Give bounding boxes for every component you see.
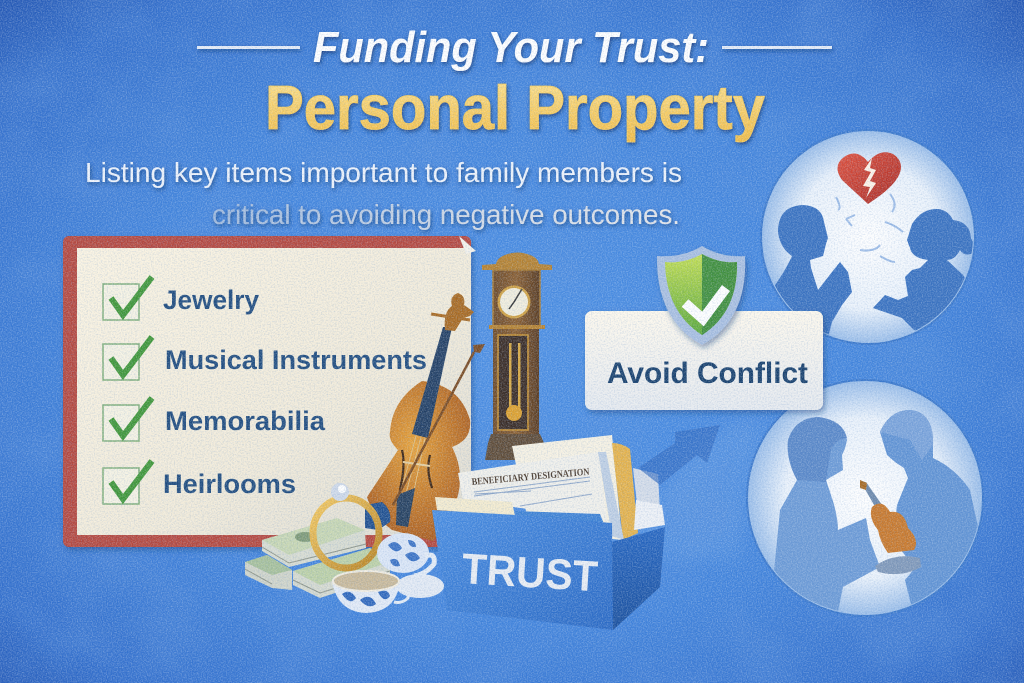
label: trust: TRUST: [460, 545, 599, 601]
silhouette: arguing man: [775, 205, 852, 334]
silhouette: person passing violin: [770, 417, 880, 612]
panel: avoid conflict card: [585, 311, 823, 410]
label: avoid conflict: Avoid Conflict: [607, 357, 808, 390]
subtitle: critical to avoiding negative outcomes.: [212, 199, 680, 230]
title line one: Funding Your Trust:: [313, 23, 709, 72]
icon: gold ring: [313, 483, 379, 568]
checklist item: Jewelry: [103, 277, 259, 320]
head hair: left person: [788, 417, 847, 482]
silhouette: person receiving violin: [880, 410, 985, 608]
icon: grandfather clock: [482, 252, 552, 460]
checklist item: Musical Instruments: Musical Instruments: [165, 345, 427, 375]
silhouette: arguing woman: [873, 209, 973, 330]
checklist item: Heirlooms: Heirlooms: [163, 469, 296, 499]
icon: small violin: [860, 480, 921, 574]
title: [197, 23, 832, 143]
icon: trust folder: [432, 510, 665, 630]
label: beneficiary designation: BENEFICIARY DESIGNATION: [471, 467, 590, 488]
subtitle: Listing key items important to family members is: [85, 157, 682, 188]
panel: harmony circle: [747, 380, 985, 616]
checklist item: Heirlooms: [103, 461, 296, 504]
icon: arrow to conflict outcome: [638, 425, 720, 485]
panel: conflict circle: [750, 130, 978, 350]
icon: teapot and teacup: [332, 533, 444, 613]
checklist item: Memorabilia: [103, 398, 326, 441]
checklist item: Memorabilia: Memorabilia: [165, 406, 326, 436]
icon: shield with check: [657, 246, 745, 345]
checklist item: Musical Instruments: [103, 337, 427, 380]
panel: checklist board: [63, 236, 476, 547]
blue pouch: [365, 502, 390, 530]
head hair: right person: [880, 410, 933, 460]
icon: cash stacks: [245, 518, 390, 598]
icon: papers in folder: [435, 435, 665, 540]
subtitle: [85, 157, 682, 230]
icon: broken heart: [837, 152, 901, 204]
icon: violin: [365, 293, 485, 541]
checklist item: Jewelry: Jewelry: [163, 285, 259, 315]
title line two: Personal Property: [265, 74, 765, 143]
conflict spark marks: [836, 194, 903, 262]
